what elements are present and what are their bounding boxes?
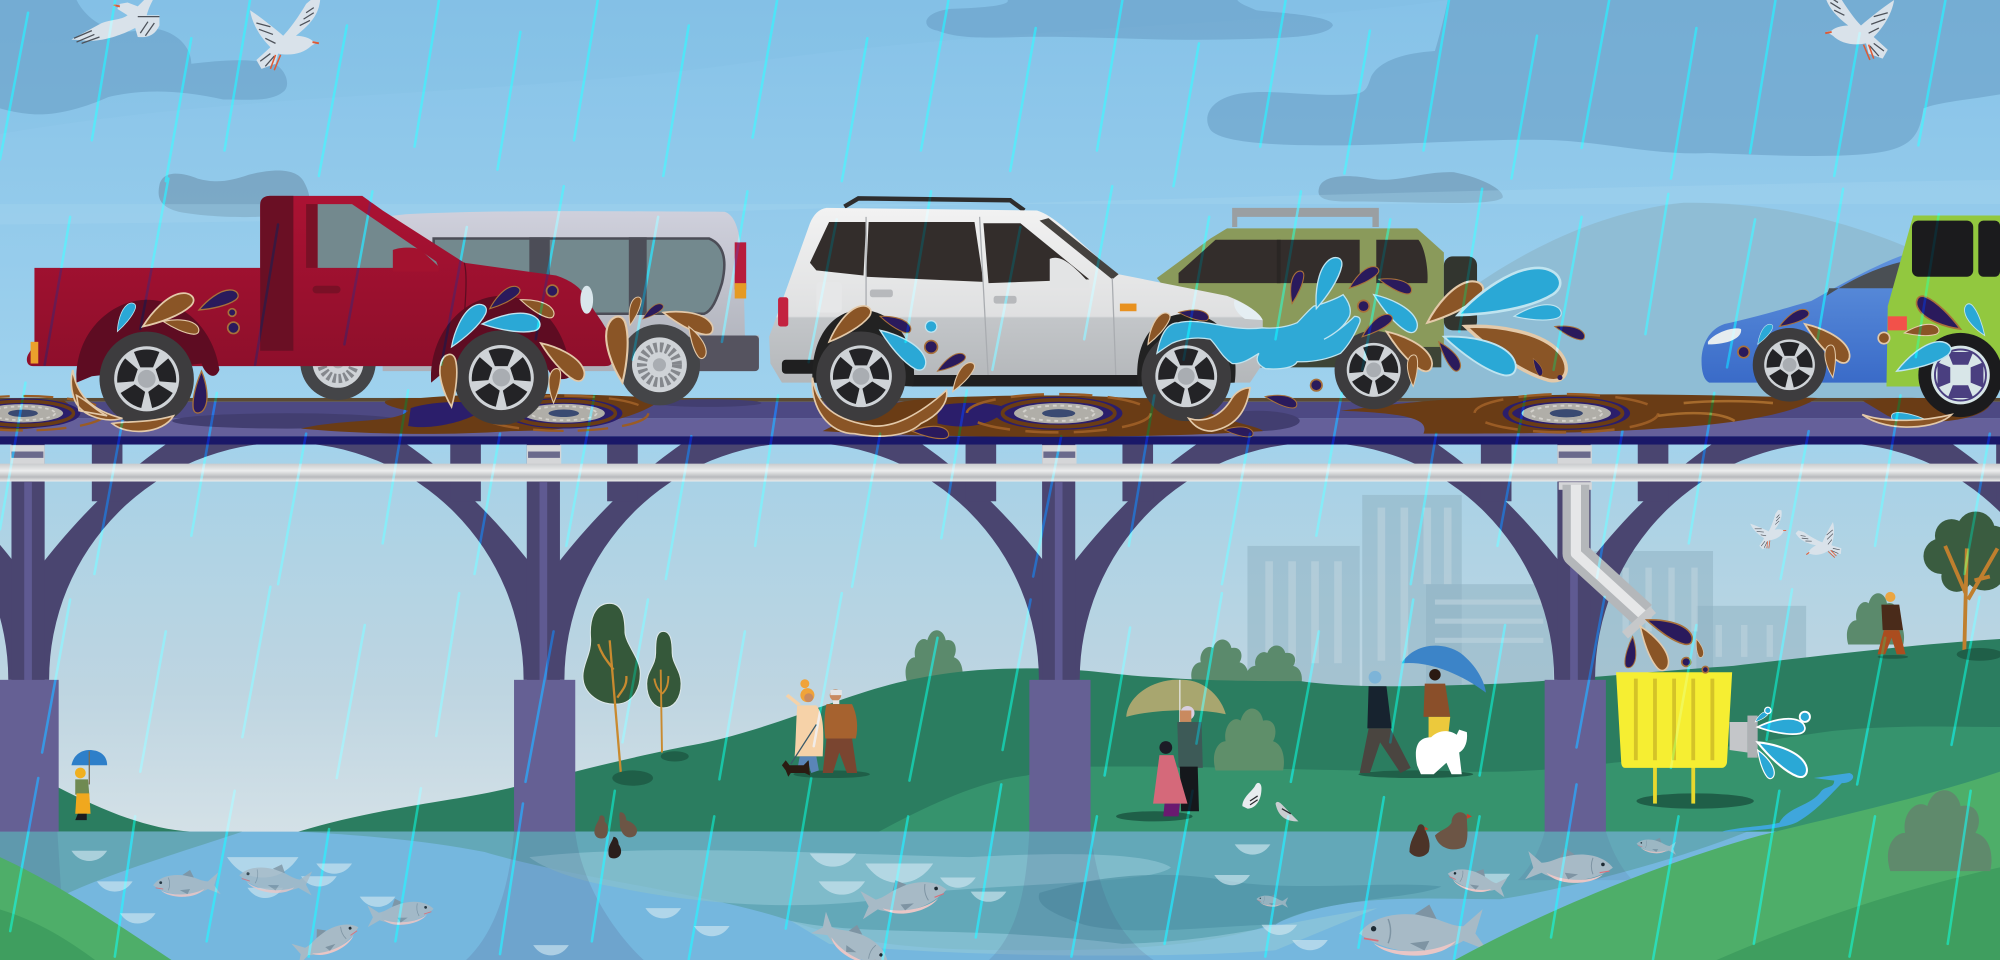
white SUV (769, 198, 1263, 421)
bridge arches (0, 443, 2000, 680)
yellow collection tank (1616, 672, 1754, 809)
silver van (300, 211, 759, 405)
trees (583, 511, 2000, 786)
couple walking a dog (782, 679, 870, 778)
bush on lawn (1214, 709, 1284, 771)
road deck (0, 398, 2000, 445)
fish in the river (153, 835, 1678, 960)
seagulls (71, 0, 1894, 568)
water (0, 832, 2000, 960)
two walkers with white dog and blue umbrella (1358, 646, 1486, 778)
walker in the distance (1878, 592, 1908, 659)
guardrail pipe with mounts (0, 445, 2000, 490)
drain pipe with dirty water (1576, 485, 1709, 673)
mud and water droplets (71, 247, 1995, 447)
green SUV (1157, 208, 1477, 409)
family under olive umbrella (1116, 680, 1226, 821)
vehicle shadows on road (172, 399, 1300, 431)
blue water splash from white SUV (1157, 295, 1360, 369)
bush on front hill (1888, 790, 1992, 871)
clouds (0, 0, 2000, 224)
bridge piers (0, 443, 1606, 832)
blue car (1702, 255, 1913, 402)
distant hill (1352, 203, 1926, 398)
ducks right (1409, 812, 1472, 857)
muddy puddles (0, 394, 1990, 437)
pigeons (1242, 783, 1298, 821)
foreground hills (0, 772, 2000, 960)
city buildings (1247, 495, 1806, 686)
woman with blue umbrella (71, 750, 107, 820)
grass hills (0, 639, 2000, 842)
wavelets on water (71, 844, 1510, 955)
red pickup truck (27, 196, 612, 426)
ducks left (594, 812, 637, 858)
tank outlet with clean water stream (1722, 707, 1853, 832)
background bushes (906, 593, 1904, 684)
green van (1886, 216, 2000, 417)
